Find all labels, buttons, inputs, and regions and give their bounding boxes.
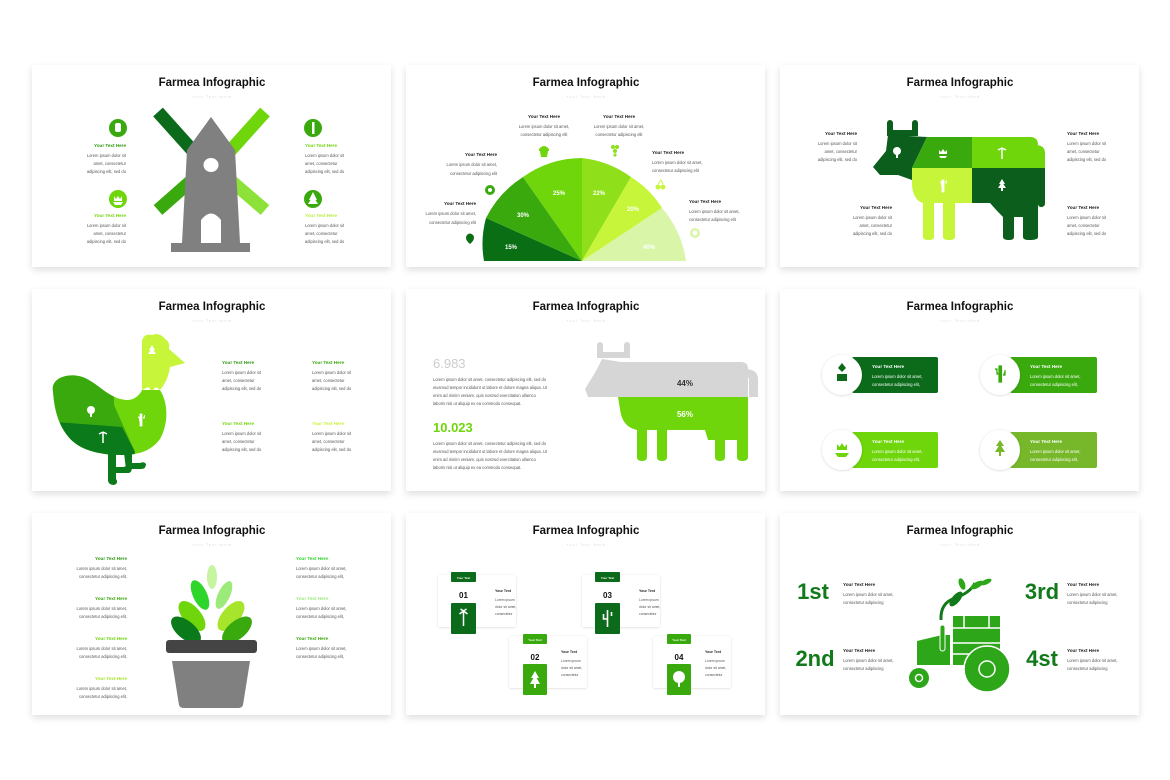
- text blocks: adipiscing elit, sed do: [818, 157, 858, 162]
- text blocks: adipiscing elit, sed do: [222, 386, 262, 391]
- right items: adipiscing elit, sed do: [305, 239, 345, 244]
- text blocks: adipiscing elit, sed do: [312, 386, 352, 391]
- cow chart: [585, 345, 758, 461]
- semicircle chart: [483, 158, 686, 261]
- title: [533, 301, 640, 323]
- title: Farmea Infographic: [533, 301, 640, 313]
- text blocks: [818, 131, 1107, 236]
- panel: cards slide: [780, 289, 1139, 491]
- ranks: [795, 579, 1059, 671]
- title: [907, 77, 1014, 99]
- right items: [304, 119, 345, 244]
- title: [159, 77, 266, 99]
- right text blocks: consectetur adipiscing elit,: [296, 574, 344, 579]
- title: Your Text Here: [566, 318, 606, 323]
- right text blocks: consectetur adipiscing elit,: [296, 654, 344, 659]
- text blocks: Lorem ipsum dolor sit amet,: [843, 658, 894, 663]
- ranks: 4st: [1026, 646, 1059, 671]
- card 3: Your Text Here: [872, 439, 904, 444]
- card 02: Lorem ipsum: [561, 659, 581, 663]
- text blocks: adipiscing elit, sed do: [1067, 157, 1107, 162]
- text blocks: amet, consectetur: [1067, 149, 1100, 154]
- text blocks: Your Text Here: [860, 205, 892, 210]
- card 2: Lorem ipsum dolor sit amet,: [1030, 374, 1081, 379]
- text blocks: Lorem ipsum dolor sit amet,: [1067, 592, 1118, 597]
- text blocks: Lorem ipsum dolor sit amet,: [425, 211, 476, 216]
- title: Farmea Infographic: [907, 525, 1014, 537]
- card 03: 03: [603, 591, 612, 600]
- text blocks: Your Text Here: [1067, 648, 1099, 653]
- card 02: 02: [531, 653, 540, 662]
- stat 2: laboris nisi ut aliquip ex ea commodo consequat.: [433, 465, 521, 470]
- hen: [42, 334, 185, 485]
- left text blocks: consectetur adipiscing elit,: [79, 654, 127, 659]
- left items: Lorem ipsum dolor sit: [87, 153, 127, 158]
- text blocks: Your Text Here: [312, 360, 344, 365]
- stat 2: [433, 420, 548, 470]
- cow chart: 56%: [677, 410, 693, 419]
- card 4: [980, 430, 1097, 470]
- text blocks: consectetur adipiscing: [843, 600, 884, 605]
- card 3: consectetur adipiscing elit,: [872, 457, 920, 462]
- stat 1: eiusmod tempor incididunt ut labore et dolore magna aliqua. Ut: [433, 385, 548, 390]
- card 1: consectetur adipiscing elit,: [872, 382, 920, 387]
- ranks: 3rd: [1025, 579, 1059, 604]
- left text blocks: consectetur adipiscing elit,: [79, 694, 127, 699]
- card 02: Your Text: [528, 638, 542, 642]
- text blocks: consectetur adipiscing elit: [521, 132, 568, 137]
- title: Farmea Infographic: [159, 525, 266, 537]
- card 4: consectetur adipiscing elit,: [1030, 457, 1078, 462]
- text blocks: amet, consectetur: [859, 223, 893, 228]
- title: [533, 77, 640, 99]
- right text blocks: Your Text Here: [296, 636, 328, 641]
- left text blocks: Your Text Here: [95, 676, 127, 681]
- card 01: consectetur: [495, 612, 513, 616]
- right items: Lorem ipsum dolor sit: [305, 223, 345, 228]
- text blocks: Lorem ipsum dolor sit amet,: [843, 592, 894, 597]
- text blocks: Your Text Here: [1067, 205, 1099, 210]
- text blocks: amet, consectetur: [222, 439, 255, 444]
- card 01: Lorem ipsum: [495, 598, 515, 602]
- right text blocks: Lorem ipsum dolor sit amet,: [296, 566, 347, 571]
- semicircle chart: 15%: [505, 245, 518, 251]
- windmill: [158, 112, 265, 252]
- card 01: dolor sit amet,: [495, 605, 516, 609]
- text blocks: Lorem ipsum dolor sit amet,: [689, 209, 740, 214]
- title: Your Text Here: [940, 318, 980, 323]
- card 4: Your Text Here: [1030, 439, 1062, 444]
- text blocks: consectetur adipiscing: [843, 666, 884, 671]
- text blocks: Your Text Here: [1067, 131, 1099, 136]
- text blocks: consectetur adipiscing elit: [652, 168, 700, 173]
- text blocks: Your Text Here: [1067, 582, 1099, 587]
- text blocks: Lorem ipsum dolor sit: [222, 370, 262, 375]
- card 03: consectetur: [639, 612, 657, 616]
- text blocks: amet, consectetur: [222, 378, 255, 383]
- text blocks: adipiscing elit, sed do: [853, 231, 893, 236]
- stat 2: Lorem ipsum dolor sit amet, consectetur adipiscing elit, sed do: [433, 441, 547, 446]
- text blocks: Your Text Here: [652, 150, 684, 155]
- left text blocks: consectetur adipiscing elit,: [79, 614, 127, 619]
- card 01: [438, 572, 516, 634]
- card 04: dolor sit amet,: [705, 666, 726, 670]
- right items: Your Text Here: [305, 213, 337, 218]
- title: Your Text Here: [940, 542, 980, 547]
- card 03: Lorem ipsum: [639, 598, 659, 602]
- text blocks: Your Text Here: [825, 131, 857, 136]
- text blocks: [843, 582, 1118, 671]
- text blocks: adipiscing elit, sed do: [1067, 231, 1107, 236]
- stat 1: Lorem ipsum dolor sit amet, consectetur adipiscing elit, sed do: [433, 377, 547, 382]
- text blocks: consectetur adipiscing elit: [450, 171, 498, 176]
- card 02: consectetur: [561, 673, 579, 677]
- title: Farmea Infographic: [159, 77, 266, 89]
- title: Farmea Infographic: [533, 77, 640, 89]
- stat 1: laboris nisi ut aliquip ex ea commodo consequat.: [433, 401, 521, 406]
- left text blocks: Your Text Here: [95, 596, 127, 601]
- text blocks: [222, 360, 352, 452]
- card 01: Your Text: [457, 576, 470, 580]
- card 03: dolor sit amet,: [639, 605, 660, 609]
- tractor: [909, 577, 1010, 692]
- text blocks: Your Text Here: [843, 648, 875, 653]
- text blocks: amet, consectetur: [312, 378, 345, 383]
- title: Your Text Here: [566, 542, 606, 547]
- left text blocks: Your Text Here: [95, 556, 127, 561]
- text blocks: adipiscing elit, sed do: [312, 447, 352, 452]
- right text blocks: Your Text Here: [296, 596, 328, 601]
- card 01: Your Text: [495, 589, 512, 593]
- semicircle chart: 40%: [643, 245, 656, 251]
- card 03: Your Text: [601, 576, 614, 580]
- card 03: Your Text: [639, 589, 656, 593]
- text blocks: consectetur adipiscing elit: [596, 132, 643, 137]
- right items: Your Text Here: [305, 143, 337, 148]
- card 04: [653, 634, 731, 695]
- text blocks: Your Text Here: [222, 360, 254, 365]
- right text blocks: consectetur adipiscing elit,: [296, 614, 344, 619]
- text blocks: Lorem ipsum dolor sit: [1067, 141, 1107, 146]
- title: Farmea Infographic: [907, 301, 1014, 313]
- text blocks: [425, 114, 740, 225]
- left text blocks: [76, 556, 127, 699]
- text blocks: Your Text Here: [465, 152, 497, 157]
- stat 1: [433, 356, 548, 406]
- panel: numbered cards slide: [406, 513, 765, 715]
- text blocks: Your Text Here: [222, 421, 254, 426]
- text blocks: Your Text Here: [843, 582, 875, 587]
- card 4: Lorem ipsum dolor sit amet,: [1030, 449, 1081, 454]
- card 04: Your Text: [705, 650, 722, 654]
- text blocks: Lorem ipsum dolor sit amet,: [652, 160, 703, 165]
- ranks: 2nd: [795, 646, 835, 671]
- left text blocks: Lorem ipsum dolor sit amet,: [76, 686, 127, 691]
- card 04: consectetur: [705, 673, 723, 677]
- left items: Your Text Here: [94, 143, 126, 148]
- title: Your Text Here: [192, 542, 232, 547]
- card 2: [980, 355, 1097, 395]
- text blocks: Lorem ipsum dolor sit amet,: [446, 162, 497, 167]
- panel: tractor slide: [780, 513, 1139, 715]
- panel: hen slide: [32, 289, 391, 491]
- title: Your Text Here: [940, 94, 980, 99]
- stat 1: enim ad minim veniam, quis nostrud exercitation ullamco: [433, 393, 537, 398]
- title: Farmea Infographic: [533, 525, 640, 537]
- left text blocks: consectetur adipiscing elit,: [79, 574, 127, 579]
- text blocks: adipiscing elit, sed do: [222, 447, 262, 452]
- text blocks: Your Text Here: [603, 114, 635, 119]
- semicircle chart: 22%: [593, 191, 606, 197]
- title: Farmea Infographic: [907, 77, 1014, 89]
- right items: amet, consectetur: [305, 161, 338, 166]
- title: [533, 525, 640, 547]
- text blocks: Your Text Here: [312, 421, 344, 426]
- left items: Your Text Here: [94, 213, 126, 218]
- left items: [87, 119, 127, 244]
- right items: amet, consectetur: [305, 231, 338, 236]
- right text blocks: Lorem ipsum dolor sit amet,: [296, 606, 347, 611]
- card 1: Lorem ipsum dolor sit amet,: [872, 374, 923, 379]
- text blocks: Lorem ipsum dolor sit amet,: [519, 124, 569, 129]
- text blocks: Lorem ipsum dolor sit: [1067, 215, 1107, 220]
- left text blocks: Lorem ipsum dolor sit amet,: [76, 566, 127, 571]
- panel: stats cow slide: [406, 289, 765, 491]
- right items: Lorem ipsum dolor sit: [305, 153, 345, 158]
- text blocks: Lorem ipsum dolor sit: [312, 370, 352, 375]
- semicircle chart: 20%: [627, 207, 640, 213]
- text blocks: amet, consectetur: [824, 149, 858, 154]
- left text blocks: Lorem ipsum dolor sit amet,: [76, 606, 127, 611]
- title: Your Text Here: [192, 318, 232, 323]
- card 01: 01: [459, 591, 468, 600]
- card 3: [822, 430, 938, 470]
- text blocks: amet, consectetur: [1067, 223, 1100, 228]
- stat 2: eiusmod tempor incididunt ut labore et dolore magna aliqua. Ut: [433, 449, 548, 454]
- stat 2: 10.023: [433, 420, 473, 435]
- card 2: consectetur adipiscing elit,: [1030, 382, 1078, 387]
- text blocks: Lorem ipsum dolor sit amet,: [594, 124, 644, 129]
- left text blocks: Lorem ipsum dolor sit amet,: [76, 646, 127, 651]
- title: [159, 525, 266, 547]
- title: [159, 301, 266, 323]
- text blocks: consectetur adipiscing elit: [689, 217, 737, 222]
- card 04: 04: [675, 653, 684, 662]
- text blocks: consectetur adipiscing: [1067, 600, 1108, 605]
- card 02: Your Text: [561, 650, 578, 654]
- cow chart: 44%: [677, 379, 693, 388]
- plant pot: [166, 565, 257, 708]
- right text blocks: Your Text Here: [296, 556, 328, 561]
- text blocks: amet, consectetur: [312, 439, 345, 444]
- left items: amet, consectetur: [93, 231, 127, 236]
- left items: amet, consectetur: [93, 161, 127, 166]
- icons: fruits: [466, 145, 700, 244]
- card 3: Lorem ipsum dolor sit amet,: [872, 449, 923, 454]
- left items: adipiscing elit, sed do: [87, 239, 127, 244]
- text blocks: Lorem ipsum dolor sit amet,: [1067, 658, 1118, 663]
- panel: cow tiles slide: [780, 65, 1139, 267]
- right text blocks: [296, 556, 347, 659]
- card 04: Lorem ipsum: [705, 659, 725, 663]
- semicircle chart: 30%: [517, 213, 530, 219]
- right items: adipiscing elit, sed do: [305, 169, 345, 174]
- ranks: 1st: [797, 579, 830, 604]
- text blocks: Your Text Here: [528, 114, 560, 119]
- text blocks: Lorem ipsum dolor sit: [222, 431, 262, 436]
- left items: Lorem ipsum dolor sit: [87, 223, 127, 228]
- text blocks: Lorem ipsum dolor sit: [312, 431, 352, 436]
- stat 2: enim ad minim veniam, quis nostrud exercitation ullamco: [433, 457, 537, 462]
- semicircle chart: 25%: [553, 191, 566, 197]
- right text blocks: Lorem ipsum dolor sit amet,: [296, 646, 347, 651]
- cow tiles: [873, 123, 1045, 240]
- text blocks: consectetur adipiscing elit: [429, 220, 477, 225]
- card 03: [582, 572, 660, 634]
- title: [907, 525, 1014, 547]
- title: Farmea Infographic: [159, 301, 266, 313]
- title: Your Text Here: [566, 94, 606, 99]
- card 02: [509, 634, 587, 695]
- left text blocks: Your Text Here: [95, 636, 127, 641]
- card 04: Your Text: [672, 638, 686, 642]
- text blocks: Lorem ipsum dolor sit: [818, 141, 858, 146]
- panel: semicircle chart slide: [406, 65, 765, 267]
- card 2: Your Text Here: [1030, 364, 1062, 369]
- panel: windmill slide: [32, 65, 391, 267]
- text blocks: Your Text Here: [444, 201, 476, 206]
- title: Your Text Here: [192, 94, 232, 99]
- panel: plant slide: [32, 513, 391, 715]
- card 1: [822, 355, 938, 395]
- text blocks: Lorem ipsum dolor sit: [853, 215, 893, 220]
- card 1: Your Text Here: [872, 364, 904, 369]
- left items: adipiscing elit, sed do: [87, 169, 127, 174]
- card 02: dolor sit amet,: [561, 666, 582, 670]
- stat 1: 6.983: [433, 356, 466, 371]
- title: [907, 301, 1014, 323]
- text blocks: Your Text Here: [689, 199, 721, 204]
- text blocks: consectetur adipiscing: [1067, 666, 1108, 671]
